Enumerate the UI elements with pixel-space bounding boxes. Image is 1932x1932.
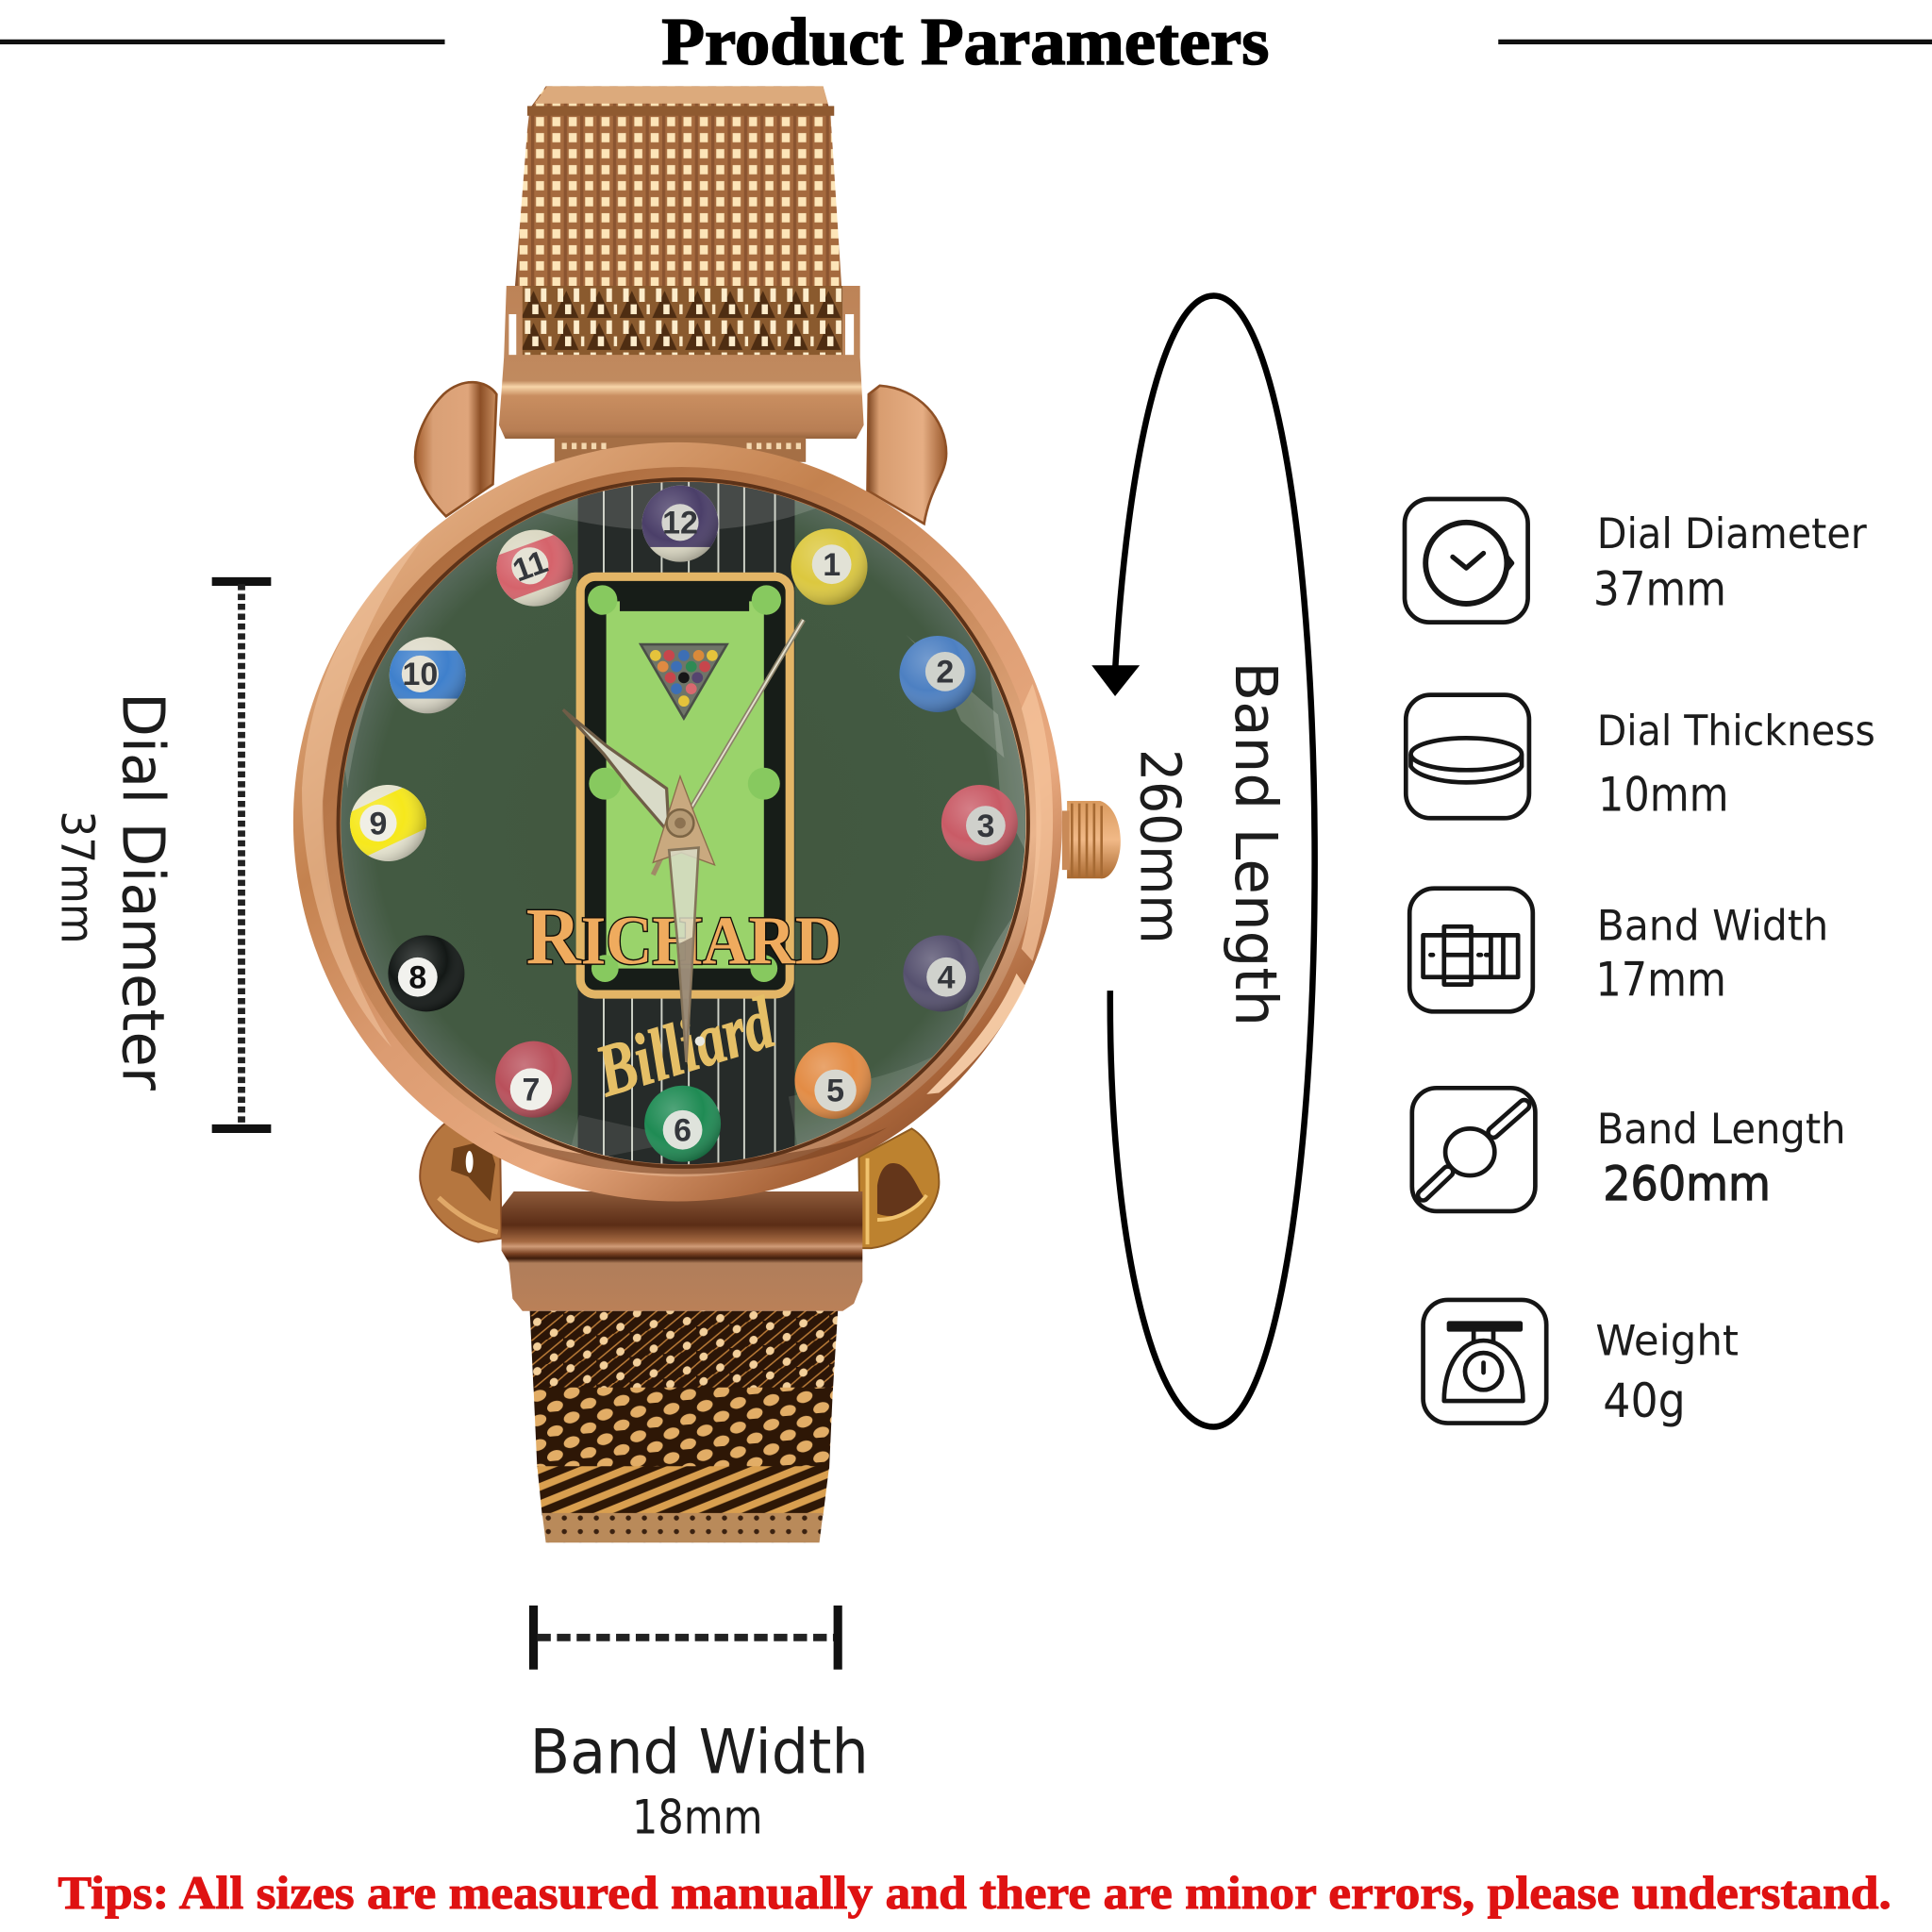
ball 10 <box>390 637 466 713</box>
footer tip: Tips: All sizes are measured manually and there are minor errors, please understand. <box>58 1867 1891 1919</box>
band length label: Band Length <box>1222 661 1289 1026</box>
dial thickness text: Dial Thickness <box>1597 708 1875 756</box>
ball 6 <box>644 1086 721 1162</box>
crown <box>1062 801 1121 878</box>
script brand text: Billiard <box>586 980 784 1112</box>
ball 3: 3 <box>976 808 994 844</box>
bottom right lug <box>858 1128 939 1248</box>
band width dimension <box>530 1606 869 1845</box>
band length number: 260mm <box>1603 1157 1771 1211</box>
spec row: band width <box>1409 889 1828 1011</box>
band width bracket <box>534 1606 838 1670</box>
dial diameter bracket <box>212 581 271 1128</box>
dial diameter text: Dial Diameter <box>1597 510 1867 558</box>
band length dimension <box>1091 295 1315 1426</box>
dial face <box>341 478 1025 1171</box>
top clasp <box>499 286 864 462</box>
ball 5: 5 <box>826 1074 844 1109</box>
spec row: band length <box>1412 1088 1846 1211</box>
watch hands <box>563 620 804 1062</box>
icon: kitchen scale <box>1424 1300 1546 1424</box>
dial diameter number: 37mm <box>1593 561 1726 616</box>
ball 2 <box>899 636 975 712</box>
billiard table <box>580 576 790 994</box>
band length text: Band Length <box>1597 1106 1846 1154</box>
ball 1: 1 <box>823 547 841 583</box>
bottom clasp <box>502 1191 862 1311</box>
ball 9: 9 <box>370 806 387 841</box>
dial diameter value: 37mm <box>50 810 103 943</box>
ball 3 <box>941 785 1018 861</box>
dial diameter dimension <box>50 581 271 1128</box>
bottom mesh band <box>530 1311 838 1542</box>
ball 4: 4 <box>938 960 956 996</box>
top left lug <box>415 382 496 516</box>
spec row: dial thickness <box>1406 695 1875 822</box>
weight number: 40g <box>1603 1374 1686 1428</box>
ball 11: 11 <box>508 543 552 589</box>
ball 12: 12 <box>662 506 698 541</box>
top mesh band <box>515 86 842 358</box>
band width label: Band Width <box>530 1717 869 1789</box>
bezel <box>293 442 1062 1201</box>
ball 4 <box>903 935 979 1011</box>
ball 10: 10 <box>403 657 438 692</box>
icon: belt <box>1409 889 1533 1011</box>
ball 8 <box>388 935 464 1011</box>
ball 6: 6 <box>674 1112 691 1148</box>
band length value: 260mm <box>1127 749 1192 943</box>
band width number: 17mm <box>1595 952 1726 1007</box>
icon: disc <box>1406 695 1529 818</box>
title: Product Parameters <box>661 6 1269 79</box>
icon: clock <box>1405 499 1528 623</box>
ball 9 <box>349 785 426 861</box>
band width text: Band Width <box>1597 903 1828 951</box>
bottom left lug <box>420 1123 502 1242</box>
ball 2: 2 <box>936 655 954 691</box>
icon: wristband <box>1412 1088 1535 1211</box>
loop arrow <box>1091 295 1315 1426</box>
brand name: RICHARD <box>526 891 841 981</box>
glass reflections <box>341 480 1025 1164</box>
ball 11 <box>496 530 574 607</box>
centre pinstripe column <box>578 478 794 1171</box>
ball 7: 7 <box>523 1072 540 1108</box>
weight text: Weight <box>1595 1318 1739 1366</box>
ball 1 <box>791 528 868 605</box>
spec row: dial diameter <box>1405 499 1867 623</box>
ball 12 <box>641 486 718 562</box>
top right lug <box>868 386 946 524</box>
rack of balls triangle <box>641 644 727 718</box>
dial diameter label: Dial Diameter <box>109 692 176 1091</box>
band width value: 18mm <box>632 1790 762 1845</box>
ball 8: 8 <box>408 960 426 996</box>
dial thickness number: 10mm <box>1598 767 1728 822</box>
spec row: weight <box>1424 1300 1739 1428</box>
ball 5 <box>794 1042 871 1119</box>
watch illustration <box>293 86 1121 1542</box>
ball 7 <box>495 1041 572 1118</box>
